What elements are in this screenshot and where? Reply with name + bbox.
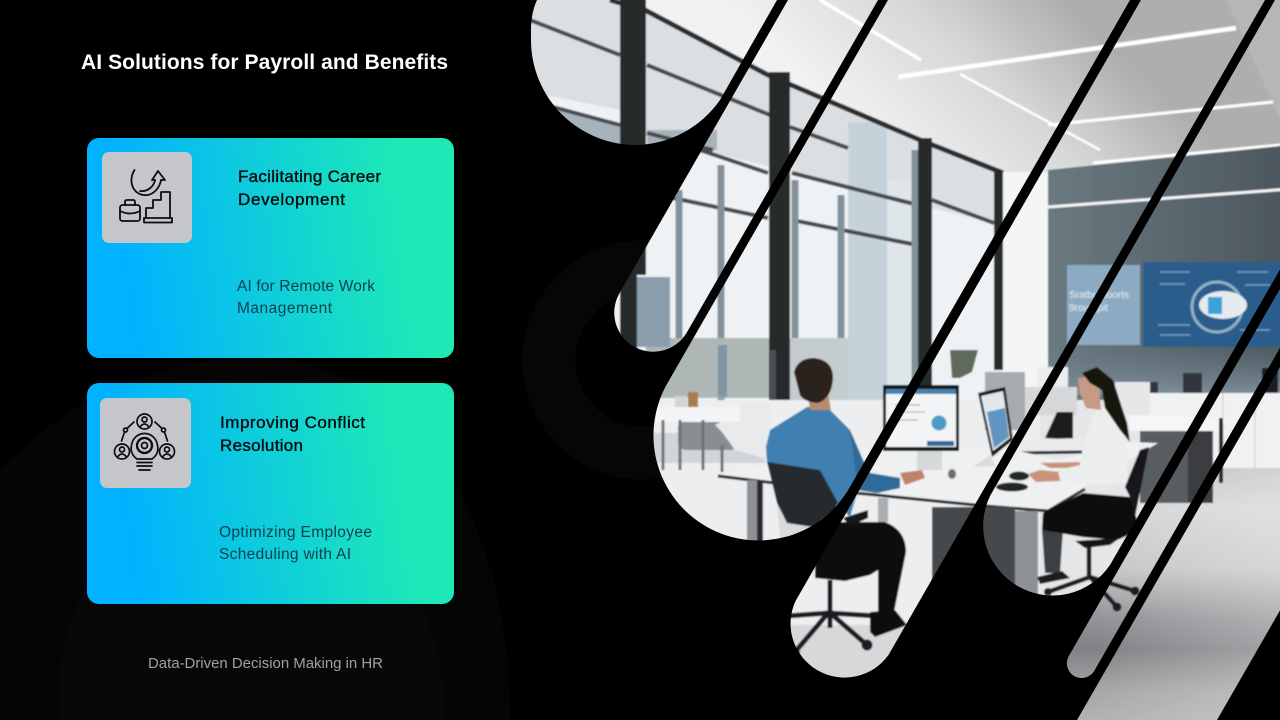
text: optimizing employee scheduling: Scheduling with AI xyxy=(219,546,351,563)
window wall xyxy=(531,0,1004,402)
keyboard and mice xyxy=(948,469,1029,492)
woman seated at desk xyxy=(1028,367,1140,584)
heading: facilitating career development: Facilitating Career xyxy=(238,167,381,186)
right white wall xyxy=(1003,172,1048,407)
panel: career development card xyxy=(87,138,454,358)
plant xyxy=(950,350,978,378)
text: ai for remote work management: Management xyxy=(237,300,333,317)
floor xyxy=(768,398,1042,624)
woman's chair base xyxy=(1044,547,1140,612)
ceiling xyxy=(614,0,1280,174)
wall screen xyxy=(1067,262,1280,347)
heading: improving conflict resolution: Resolution xyxy=(220,436,303,455)
icon: career stairs and briefcase xyxy=(102,152,192,243)
left background table and chairs xyxy=(655,392,770,472)
heading: improving conflict resolution: Improving Conflict xyxy=(220,413,365,432)
wall screen: Sratbu poorts xyxy=(1069,290,1129,301)
icon: lightbulb with gear and people xyxy=(100,398,191,488)
office photo collage in slanted strips xyxy=(520,0,1280,720)
panel: conflict resolution card xyxy=(87,383,454,604)
monitors xyxy=(883,372,1025,470)
wall screen: 9roup pit xyxy=(1069,303,1108,314)
back desk units and cabinets xyxy=(1018,367,1280,503)
text: ai for remote work management: AI for Remote Work xyxy=(237,278,375,295)
man's chair back xyxy=(767,462,838,540)
footer caption: Data-Driven Decision Making in HR xyxy=(148,655,383,672)
man seated at desk xyxy=(766,358,925,637)
ceiling light strips xyxy=(820,0,1280,163)
title: AI Solutions for Payroll and Benefits xyxy=(81,51,448,74)
man's chair base xyxy=(790,578,874,654)
heading: facilitating career development: Development xyxy=(238,190,345,209)
main white desk xyxy=(718,442,1158,601)
dark glass wall xyxy=(1048,145,1280,400)
woman's chair back xyxy=(1125,447,1149,517)
text: optimizing employee scheduling: Optimizing Employee xyxy=(219,524,372,541)
